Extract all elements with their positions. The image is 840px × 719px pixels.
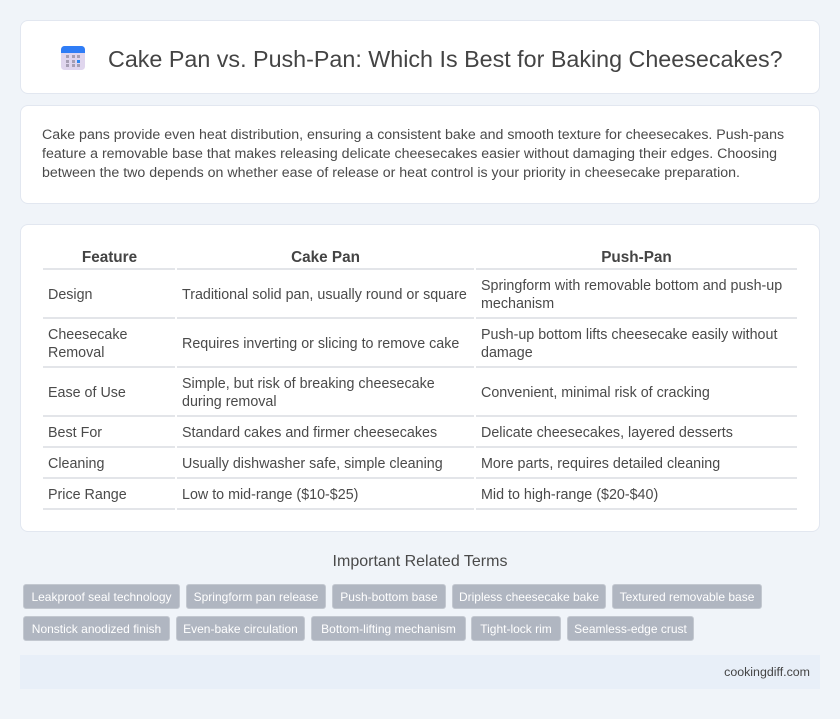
row: cheesecake removal: Removal [48, 345, 104, 361]
panel: introduction text [20, 105, 820, 204]
row: ease of use: Simple, but risk of breaking cheesecake [182, 376, 435, 392]
chip [612, 584, 762, 609]
chip [23, 584, 180, 609]
row: ease of use: Convenient, minimal risk of cracking [481, 385, 710, 401]
intro paragraph [42, 127, 784, 181]
row: best for: Best For [48, 425, 102, 441]
chip: Seamless-edge crust [574, 622, 687, 636]
chip [452, 584, 606, 609]
row: ease of use: during removal [182, 394, 277, 410]
row: design: Design [48, 287, 93, 303]
title: Cake Pan vs. Push-Pan: Which Is Best for Baking Cheesecakes? [108, 46, 783, 72]
row: cheesecake removal: damage [481, 345, 533, 361]
intro paragraph: Cake pans provide even heat distribution, ensuring a consistent bake and smooth texture for cheesecakes. Push-pans [42, 127, 784, 143]
chip: Springform pan release [194, 590, 318, 604]
row: cheesecake removal [48, 327, 778, 361]
heading: related terms: Important Related Terms [333, 553, 507, 570]
table header: Push-Pan [601, 249, 672, 266]
row: design: Springform with removable bottom and push-up [481, 278, 782, 294]
chip: Leakproof seal technology [31, 590, 172, 604]
panel: comparison table [20, 224, 820, 532]
intro paragraph: between the two depends on whether ease of release or heat control is your priority in cheesecake preparation. [42, 165, 740, 181]
footer bar [20, 655, 820, 689]
row: cleaning: Usually dishwasher safe, simple cleaning [182, 456, 443, 472]
chip: Push-bottom base [340, 590, 438, 604]
row: cheesecake removal: Cheesecake [48, 327, 127, 343]
row: design [48, 278, 782, 312]
row: cleaning [48, 456, 720, 472]
row: price range [48, 487, 658, 503]
chip [471, 616, 561, 641]
table header: Feature [82, 249, 137, 266]
row: best for [48, 425, 733, 441]
row: design: Traditional solid pan, usually round or square [182, 287, 467, 303]
chip [567, 616, 694, 641]
chip [23, 616, 170, 641]
chip: Bottom-lifting mechanism [321, 622, 456, 636]
chip: Even-bake circulation [183, 622, 298, 636]
row: best for: Delicate cheesecakes, layered desserts [481, 425, 733, 441]
chip [311, 616, 466, 641]
row: ease of use [48, 376, 710, 410]
panel: title header [20, 20, 820, 94]
chip [332, 584, 446, 609]
row: price range: Low to mid-range ($10-$25) [182, 487, 358, 503]
intro paragraph: feature a removable base that makes releasing delicate cheesecakes easier without damaging their edges. Choosing [42, 146, 777, 162]
related term chips [23, 584, 762, 641]
chip: Tight-lock rim [480, 622, 552, 636]
row: price range: Mid to high-range ($20-$40) [481, 487, 658, 503]
row: cleaning: Cleaning [48, 456, 104, 472]
icon: calendar [61, 46, 85, 70]
row: best for: Standard cakes and firmer cheesecakes [182, 425, 437, 441]
chip: Nonstick anodized finish [32, 622, 161, 636]
row: cheesecake removal: Push-up bottom lifts cheesecake easily without [481, 327, 777, 343]
row: price range: Price Range [48, 487, 127, 503]
chip [176, 616, 305, 641]
table header [82, 249, 672, 266]
footer source: cookingdiff.com [724, 665, 810, 679]
row: cheesecake removal: Requires inverting or slicing to remove cake [182, 336, 459, 352]
chip: Dripless cheesecake bake [459, 590, 599, 604]
row: cleaning: More parts, requires detailed cleaning [481, 456, 720, 472]
table header: Cake Pan [291, 249, 360, 266]
chip: Textured removable base [620, 590, 754, 604]
row: ease of use: Ease of Use [48, 385, 126, 401]
row: design: mechanism [481, 296, 554, 312]
chip [186, 584, 326, 609]
